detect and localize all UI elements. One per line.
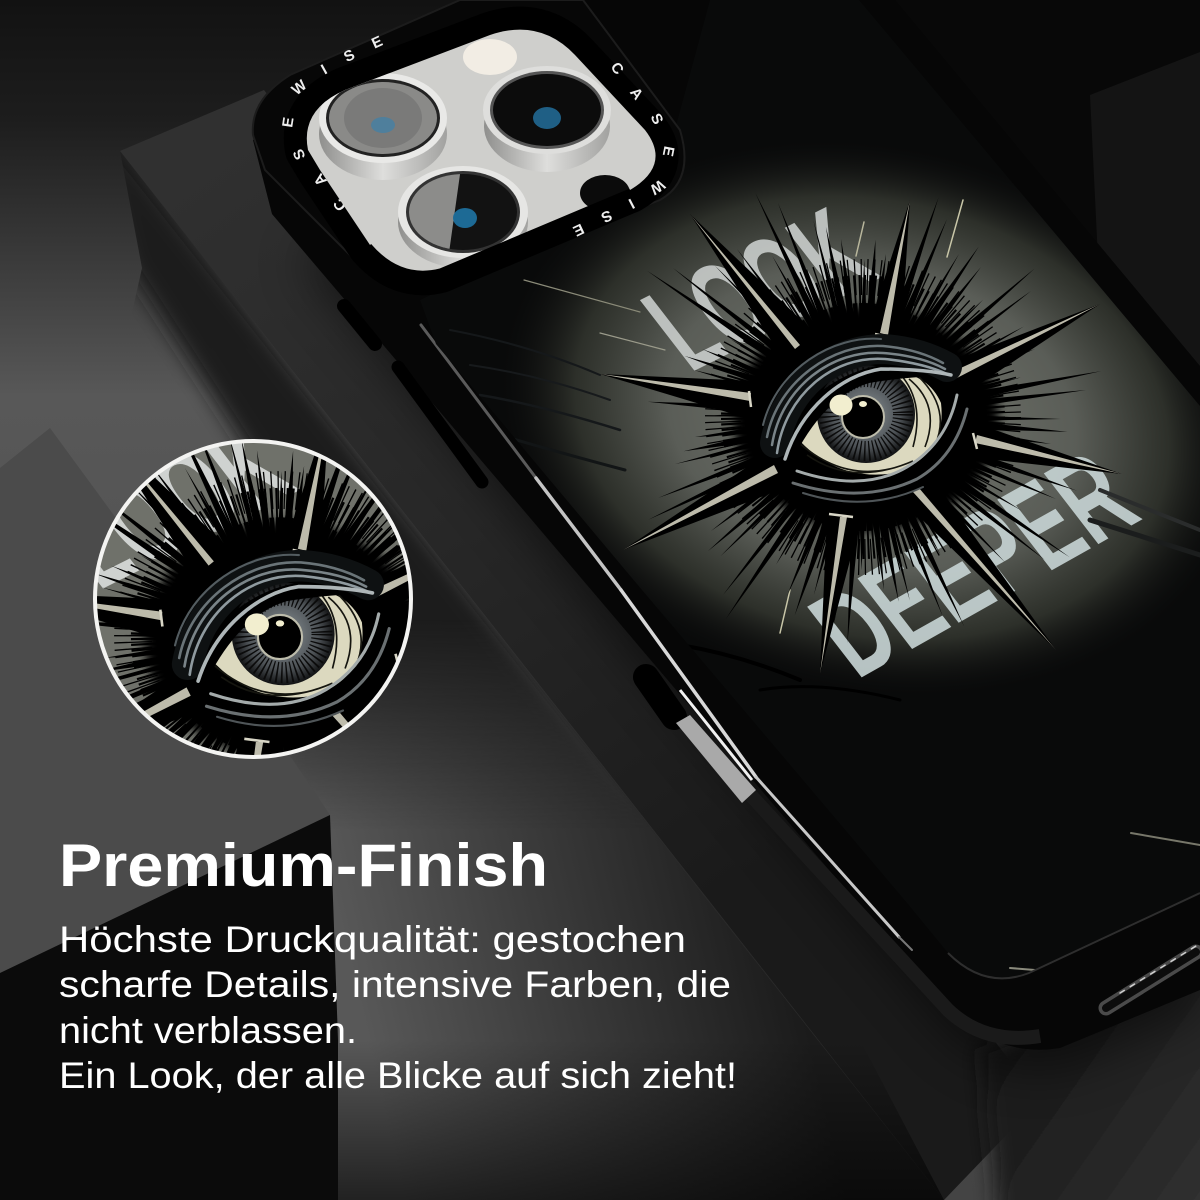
side buttons: volume groove <box>398 367 482 482</box>
power button <box>646 677 756 803</box>
camera island ring lettering right: CASEWISE <box>572 63 675 237</box>
medallion LOOK lettering: LOOK <box>23 392 319 614</box>
medallion base <box>90 436 416 762</box>
camera island lettered ring <box>307 30 656 272</box>
artwork eye burst <box>600 170 1122 674</box>
artwork base <box>434 340 448 359</box>
detail medallion <box>93 439 413 759</box>
heading: Premium-Finish <box>59 832 548 899</box>
medallion eye <box>97 443 409 755</box>
lens three <box>398 166 528 268</box>
background: lit block face <box>289 663 881 1200</box>
printed artwork <box>434 156 1200 971</box>
medallion border <box>95 441 411 757</box>
background: lower block top <box>0 428 330 973</box>
flash <box>463 39 517 75</box>
medallion artwork <box>97 443 409 755</box>
case silver rim highlight <box>421 325 912 950</box>
phone case body <box>253 0 1200 1050</box>
window ring overlap <box>370 190 630 272</box>
background: top right dark area <box>640 0 1200 520</box>
window plate <box>306 30 656 271</box>
body text: scharfe Details, intensive Farben, die <box>59 964 731 1005</box>
camera island outer <box>253 0 684 292</box>
charging port <box>1106 946 1196 1008</box>
lens two <box>483 66 611 172</box>
microphone hole <box>580 175 630 206</box>
background: large block dark side <box>122 162 905 1150</box>
background: large block top face <box>120 90 1040 1200</box>
screen edge line <box>948 893 1200 978</box>
background: lower block dark front <box>0 815 338 1200</box>
artwork glow <box>532 164 1200 672</box>
body text: Ein Look, der alle Blicke auf sich zieht! <box>59 1055 737 1096</box>
camera window <box>306 30 656 271</box>
body text: Höchste Druckqualität: gestochen <box>59 919 686 960</box>
background: bottom right floor <box>980 950 1200 1200</box>
artwork LOOK lettering: LOOK <box>618 183 900 395</box>
artwork feather streaks <box>450 200 1200 972</box>
phone case shadow <box>300 200 1200 1068</box>
body text <box>59 919 737 1096</box>
background: bottom fade <box>338 1040 944 1200</box>
lens one <box>319 73 447 180</box>
body text: nicht verblassen. <box>59 1010 357 1051</box>
side button: action <box>344 306 375 344</box>
phone side glossy band <box>700 740 1040 1038</box>
camera island ring lettering left: CASEWISE <box>282 36 383 210</box>
